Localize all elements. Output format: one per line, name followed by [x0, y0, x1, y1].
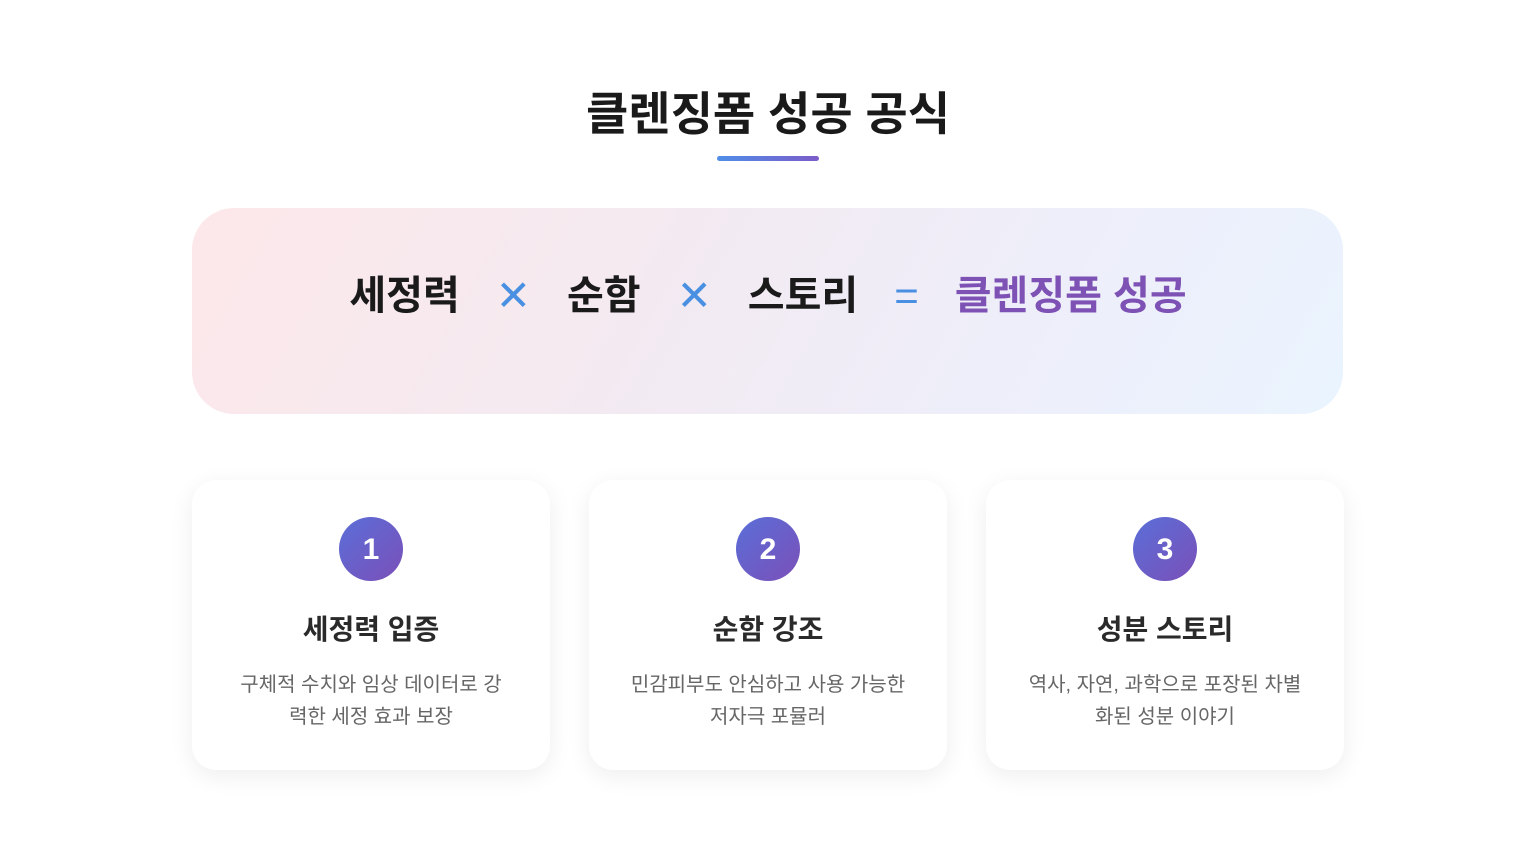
card 2	[589, 480, 947, 770]
card 3 text: 역사, 자연, 과학으로 포장된 차별화된 성분 이야기	[1029, 674, 1301, 728]
badge 2: 2	[760, 533, 776, 566]
card 3 heading: 성분 스토리	[1097, 614, 1233, 645]
formula text: 세정력	[349, 274, 460, 318]
formula text: 순함	[567, 274, 641, 318]
badge 3	[1133, 517, 1197, 581]
card 2 heading: 순함 강조	[713, 614, 823, 645]
formula text: 스토리	[748, 274, 858, 318]
formula text: =	[894, 272, 919, 319]
card 1	[192, 480, 550, 770]
card 2 text: 민감피부도 안심하고 사용 가능한 저자극 포뮬러	[631, 674, 905, 728]
badge 3: 3	[1157, 533, 1173, 566]
formula text: ✕	[496, 272, 531, 319]
title underline	[717, 156, 819, 161]
badge 1	[339, 517, 403, 581]
badge 1: 1	[363, 533, 379, 566]
title: 클렌징폼 성공 공식	[586, 88, 950, 140]
card 3	[986, 480, 1344, 770]
formula text: ✕	[677, 272, 712, 319]
badge 2	[736, 517, 800, 581]
card 1 heading: 세정력 입증	[303, 614, 439, 645]
formula text: 클렌징폼 성공	[955, 274, 1187, 318]
card 1 text: 구체적 수치와 임상 데이터로 강력한 세정 효과 보장	[240, 674, 502, 728]
panel: formula	[192, 208, 1343, 414]
formula text	[349, 272, 1187, 319]
